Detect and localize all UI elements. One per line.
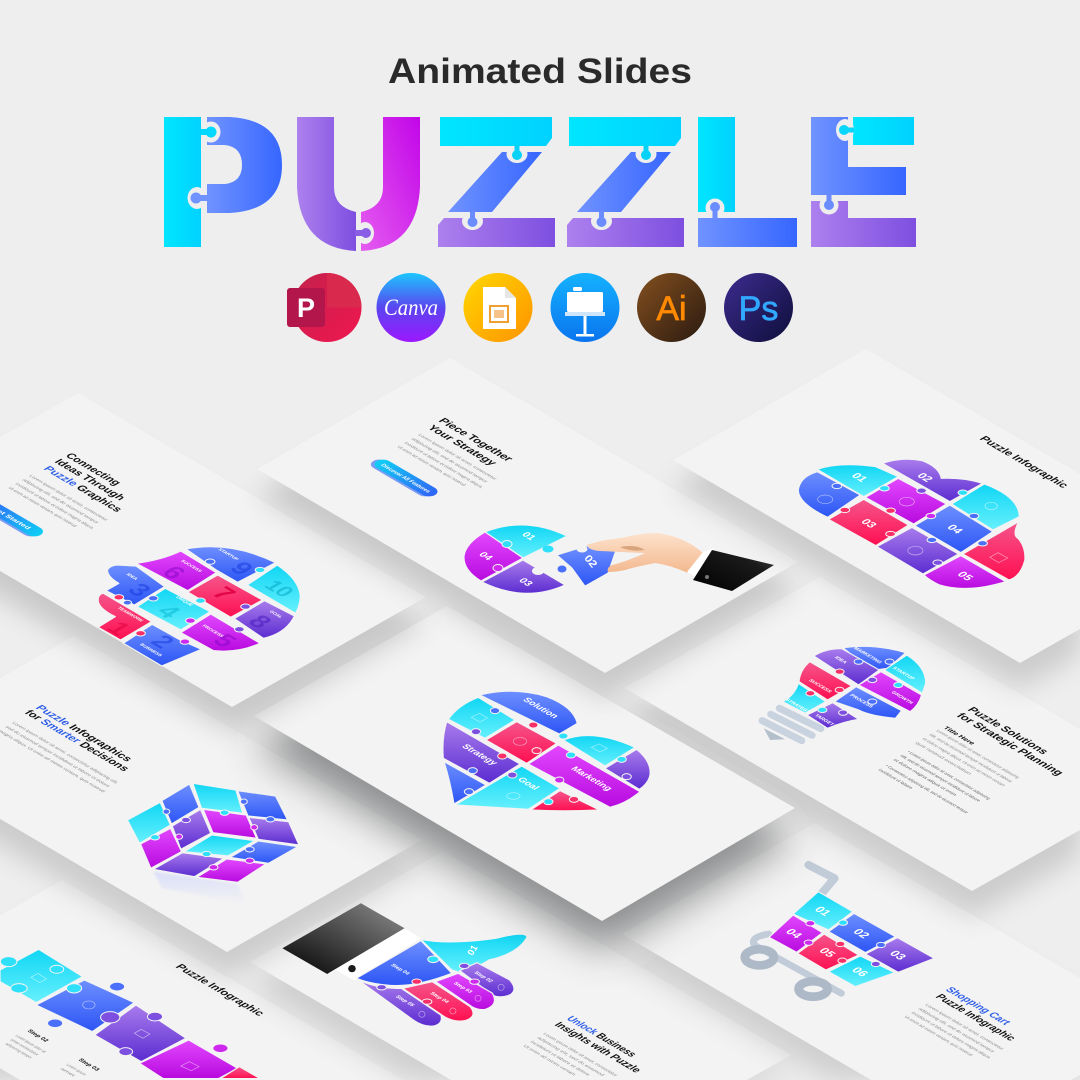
discover button	[367, 456, 441, 499]
head puzzle graphic: IDEA	[125, 573, 140, 581]
bulb sub-heading: Title Here	[941, 726, 977, 746]
letter E	[811, 117, 916, 247]
body text: Lorem ipsum dolor sit amet, consectetur	[28, 474, 110, 522]
head puzzle graphic: 6	[156, 562, 192, 583]
thumb slide body text: Ut enim ad minim veniam	[522, 1044, 577, 1076]
bulb paragraph: quis nostrud exercitation	[914, 741, 973, 776]
cube body text: magna aliqua. Ut enim ad minim veniam, quis nostrud	[0, 729, 107, 793]
thumb slide body text: adipiscing elit, sed do eiusmod	[536, 1036, 606, 1077]
head puzzle graphic: 8	[242, 611, 278, 632]
body text: Ut enim ad minim veniam, quis nostrud	[396, 445, 468, 487]
head puzzle graphic	[98, 547, 300, 666]
bulb bullet list: elit, sed do eiusmod tempor incididunt ut labore	[899, 754, 982, 803]
light bulb graphic: GROWTH	[889, 691, 915, 705]
circle puzzle graphic	[464, 525, 616, 593]
cloud puzzle graphic: 03	[858, 518, 879, 530]
slide: heart puzzle	[254, 606, 795, 951]
body text	[7, 474, 110, 530]
cart body text	[903, 1003, 1006, 1059]
cart body text: Lorem ipsum dolor sit amet, consectetur	[924, 1003, 1006, 1051]
bulb bullet list: et dolore magna aliqua ut enim	[892, 758, 958, 797]
bulb paragraph: et dolore magna aliqua. Ut enim ad minim veniam	[921, 737, 1007, 787]
icon: PowerPoint	[287, 273, 362, 342]
heading: Connecting	[62, 452, 124, 487]
bulb bullet list	[877, 750, 992, 814]
circle puzzle graphic: 01	[519, 531, 538, 542]
heart graphic	[443, 691, 650, 811]
bulb bullet list: incididunt ut labore	[877, 768, 914, 790]
slide: thumbs-up puzzle	[250, 851, 791, 1080]
cube heading: Puzzle Infographics	[32, 704, 135, 763]
head puzzle graphic: TEAMWORK	[116, 606, 145, 623]
body text: adipiscing elit, sed do eiusmod tempor	[21, 478, 101, 525]
step 03 text: Step 03	[76, 1058, 101, 1072]
cloud puzzle graphic: 01	[848, 472, 870, 484]
cart body text: incididunt ut labore et dolore magna aliqua	[910, 1011, 992, 1059]
bulb paragraph: Lorem ipsum dolor sit amet, consectetur adipiscing	[935, 729, 1021, 779]
cart body text: adipiscing elit, sed do eiusmod tempor	[917, 1007, 997, 1054]
cube heading: for Smarter Decisions	[21, 709, 132, 773]
step 02 text: adipiscing tempor	[4, 1042, 34, 1060]
light bulb graphic: TARGET	[813, 714, 835, 727]
thumb graphic: 01	[465, 943, 480, 957]
heart graphic: Marketing	[569, 765, 615, 792]
cloud puzzle graphic	[798, 459, 1025, 588]
circle puzzle graphic: 02	[581, 553, 599, 570]
cloud puzzle graphic: 04	[944, 523, 966, 536]
icon: Keynote	[550, 273, 620, 342]
icon: Canva	[376, 273, 446, 342]
bulb paragraph: elit, sed do eiusmod tempor incididunt ut labore	[928, 733, 1014, 783]
get started button	[0, 496, 47, 539]
chain title: Puzzle Infographic	[172, 963, 267, 1018]
cloud title: Puzzle Infographic	[976, 435, 1071, 490]
light bulb graphic: SUCCESS	[807, 679, 834, 694]
slide: cube puzzle	[0, 636, 422, 978]
light bulb graphic: STARTUP	[890, 666, 916, 681]
heart graphic: Solution	[521, 696, 561, 720]
cube body text	[0, 721, 120, 793]
head puzzle graphic: SUCCESS	[180, 559, 203, 573]
head puzzle graphic: 2	[144, 631, 180, 652]
thumb graphic: Step 03	[451, 981, 473, 994]
icon: Google Slides	[464, 273, 532, 342]
slide: cloud puzzle	[673, 349, 1080, 689]
thumb graphic: Step 04	[428, 991, 450, 1004]
head puzzle graphic: 10	[259, 577, 299, 600]
icon: Photoshop	[724, 273, 793, 342]
head puzzle graphic: 3	[121, 580, 157, 601]
letter Z	[567, 117, 684, 247]
slide: connecting ideas head puzzle	[0, 393, 426, 733]
heading: Your Strategy	[424, 424, 499, 467]
shopping cart graphic: 01	[811, 905, 834, 918]
shopping cart graphic: 05	[816, 946, 839, 959]
body text: incididunt ut labore et dolore magna aliqua.	[14, 482, 96, 530]
cube graphic	[127, 783, 299, 904]
head puzzle graphic: STARTUP	[217, 548, 240, 561]
body text	[396, 433, 499, 489]
icon: Canva: Canva	[384, 295, 438, 320]
cloud puzzle graphic: 05	[954, 570, 975, 582]
heading: Piece Together	[435, 417, 516, 464]
heading: Puzzle Graphics	[40, 465, 125, 514]
circle puzzle graphic: 04	[476, 551, 495, 562]
title: Animated Slides: Animated Slides	[388, 52, 692, 91]
cart body text: Ut enim ad minim veniam, quis nostrud	[903, 1015, 975, 1057]
cloud puzzle graphic: 02	[914, 472, 935, 484]
title: PUZZLE puzzle-piece lettering	[164, 117, 916, 251]
icon: Illustrator	[637, 273, 706, 342]
light bulb graphic: MARKETING	[852, 646, 883, 665]
head puzzle graphic: GOAL	[268, 610, 284, 619]
thumb graphic	[282, 903, 527, 1026]
head puzzle graphic: UNIQUE	[175, 595, 194, 607]
head puzzle graphic: BUSINESS	[139, 643, 163, 657]
step 02 text	[4, 1029, 50, 1060]
circle puzzle graphic: 03	[516, 577, 535, 588]
slide: shopping cart puzzle	[622, 823, 1080, 1080]
cart heading: Shopping Cart	[942, 986, 1013, 1027]
discover button: Discover All Features	[379, 463, 431, 494]
head puzzle graphic: 9	[223, 558, 260, 579]
head puzzle graphic: 4	[150, 601, 187, 622]
cart heading: Puzzle Infographic	[932, 993, 1018, 1043]
light bulb graphic: PROCESS	[848, 693, 875, 709]
slide: puzzle chain infographic	[0, 880, 403, 1080]
shopping cart graphic	[745, 865, 934, 997]
shopping cart graphic: 02	[850, 927, 873, 940]
thumb slide heading: Unlock Business	[563, 1015, 639, 1059]
body text: incididunt ut labore et dolore magna aliqua.	[403, 441, 485, 489]
letter P	[164, 117, 282, 247]
thumb graphic: Step 05	[394, 995, 415, 1008]
slide: light bulb puzzle	[624, 577, 1080, 917]
heart graphic: Goal	[515, 776, 542, 791]
bulb bullet list: • Lorem ipsum dolor sit amet, consectetur adipiscing	[906, 750, 992, 800]
step 02 text: amet consectetur	[9, 1038, 41, 1056]
bulb heading: Puzzle Solutions	[964, 706, 1051, 756]
icon: PowerPoint: P	[297, 293, 315, 323]
shopping cart graphic: 04	[782, 927, 805, 940]
head puzzle graphic: PROCESS	[201, 624, 225, 638]
hand holding puzzle piece	[587, 533, 774, 591]
head puzzle graphic: 5	[206, 630, 243, 651]
letter L	[698, 117, 797, 247]
heading: Ideas Through	[51, 458, 128, 502]
light bulb graphic: IDEA	[833, 656, 849, 665]
head puzzle graphic: 1	[100, 618, 137, 639]
thumb graphic: Step 02	[472, 971, 494, 984]
letter U	[297, 117, 420, 251]
icon: Illustrator: Ai	[656, 290, 687, 328]
cube body text: Lorem ipsum dolor sit amet, consectetur adipiscing elit,	[11, 721, 120, 785]
step 02 text: Step 02	[25, 1029, 50, 1043]
step 02 text: Lorem ipsum dolor sit	[14, 1034, 48, 1054]
body text: Ut enim ad minim veniam, quis nostrud	[7, 486, 79, 528]
light bulb graphic	[762, 646, 926, 741]
body text: Lorem ipsum dolor sit amet, consectetur	[417, 433, 499, 481]
icon: Photoshop: Ps	[739, 290, 778, 328]
bulb heading: for Strategic Planning	[953, 712, 1066, 777]
bulb bullet list: • Consectetur adipiscing elit, sed do eiusmod tempor	[884, 764, 970, 814]
slide: piece together circle puzzle	[257, 358, 798, 699]
thumb graphic: Step 04	[389, 963, 411, 976]
puzzle chain	[0, 949, 260, 1079]
step 03 text: Lorem ipsum	[65, 1063, 88, 1076]
letter Z	[438, 117, 555, 247]
shopping cart graphic: 06	[848, 965, 871, 979]
heart graphic: Strategy	[460, 743, 501, 767]
head puzzle graphic: 7	[205, 583, 242, 604]
thumb slide heading: Insights with Puzzle	[551, 1021, 644, 1074]
step 03 text	[59, 1058, 101, 1078]
thumb slide body text: Lorem ipsum dolor sit amet, consectetur	[542, 1032, 619, 1077]
shopping cart graphic: 03	[886, 949, 909, 962]
body text: adipiscing elit, sed do eiusmod tempor	[410, 437, 490, 484]
light bulb graphic: STRATEGY	[783, 698, 812, 715]
step 03 text: amet	[59, 1067, 77, 1078]
thumb slide body text: incididunt ut labore et dolore	[529, 1040, 592, 1077]
cube body text: sed do eiusmod tempor incididunt ut labore et dolore	[4, 725, 112, 788]
